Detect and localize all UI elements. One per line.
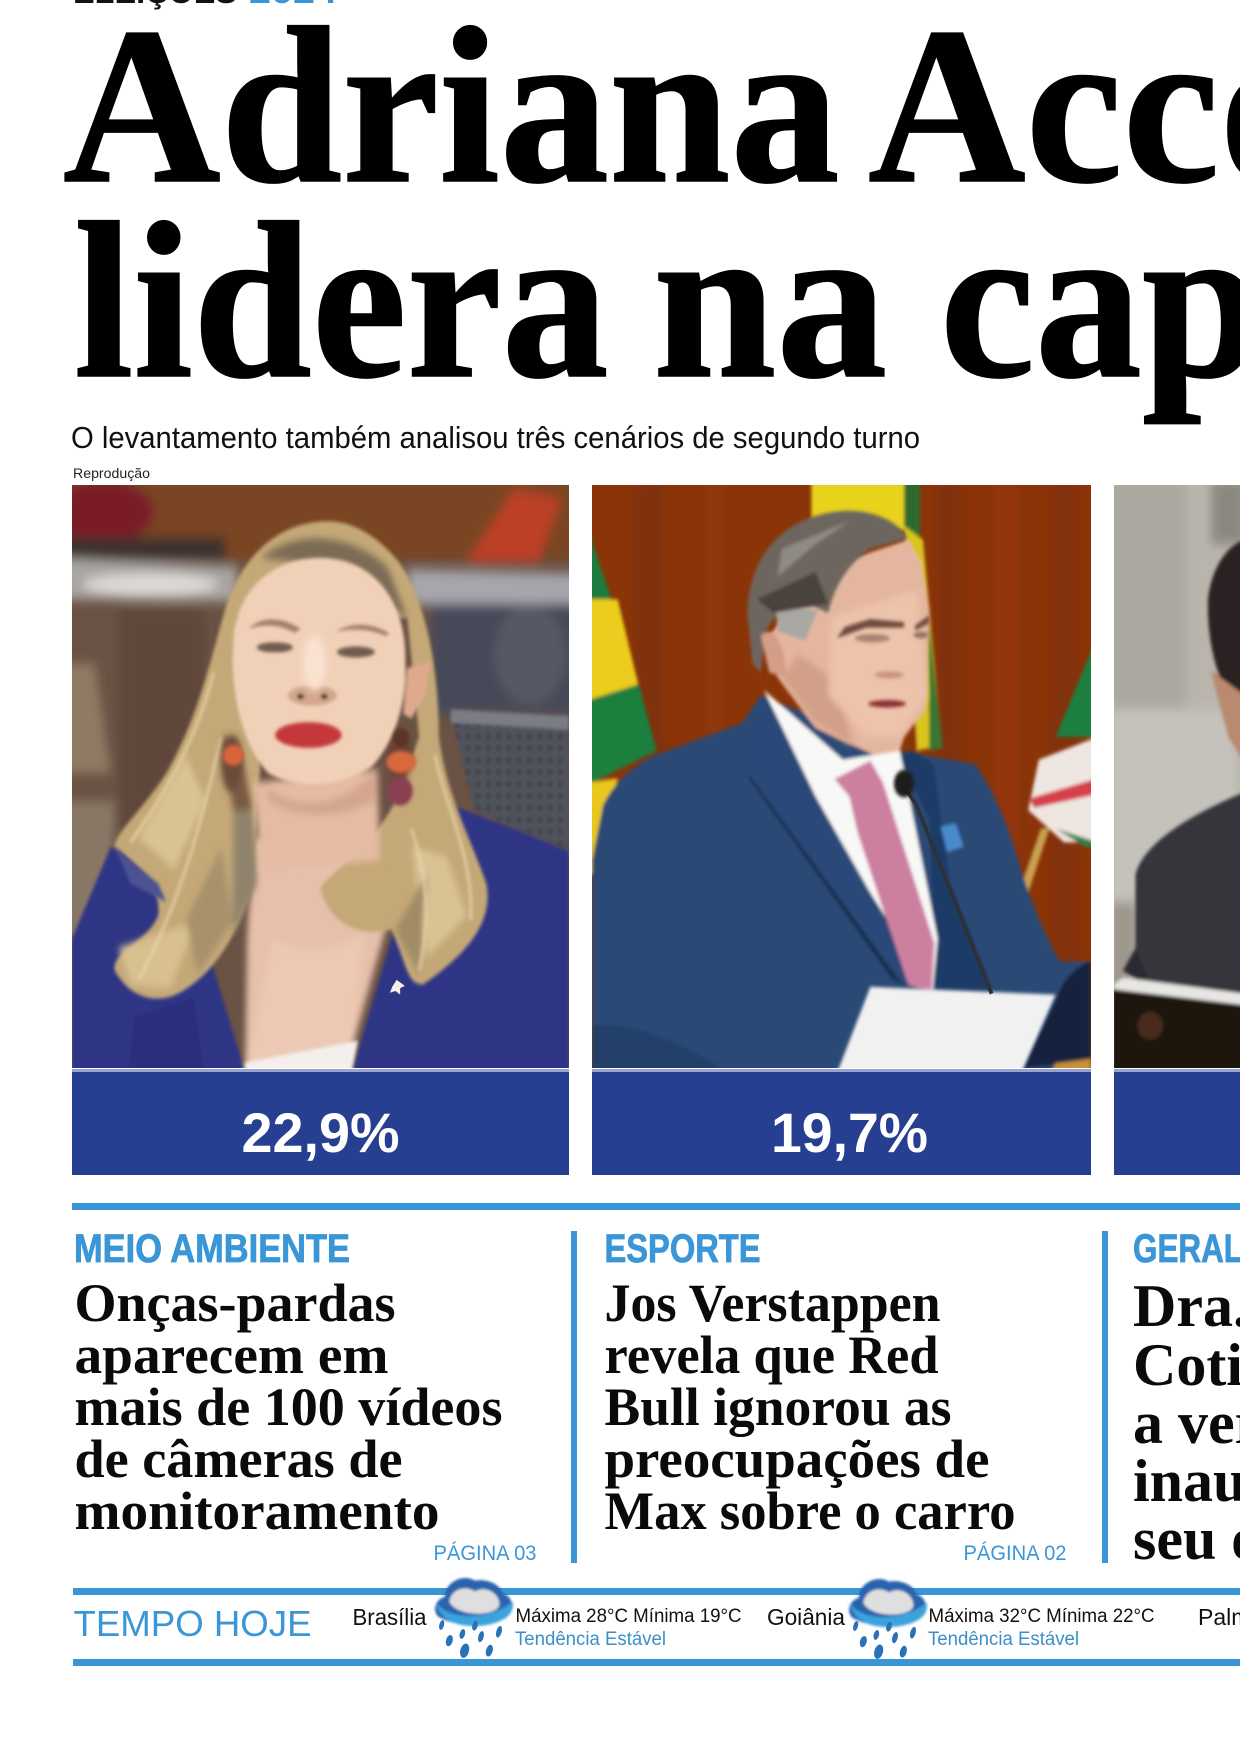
forecast text	[515, 1606, 742, 1650]
news item: geral (cropped)	[1133, 1227, 1240, 1572]
column dividers	[571, 1231, 1108, 1563]
forecast text: Máxima 32°C Mínima 22°C	[928, 1606, 1154, 1627]
forecast text: Tendência Estável	[928, 1629, 1079, 1650]
photo: Adriana Accorsi portrait	[72, 485, 569, 1068]
percent bar (value cropped)	[1114, 1069, 1240, 1175]
section label: MEIO AMBIENTE	[74, 1227, 350, 1271]
news item: meio ambiente	[74, 1227, 536, 1565]
forecast text: Máxima 28°C Mínima 19°C	[516, 1606, 742, 1627]
headline: aparecem em	[74, 1325, 389, 1385]
weather: Goiânia	[767, 1579, 1154, 1660]
headline: preocupações de	[604, 1429, 990, 1489]
headline: mais de 100 vídeos	[74, 1377, 502, 1437]
photo credit: Reprodução	[73, 465, 150, 481]
headline: Onças-pardas	[74, 1273, 396, 1333]
headline: de câmeras de	[74, 1429, 402, 1489]
section rule	[72, 1203, 1240, 1210]
headline	[74, 1273, 502, 1541]
headline: Max sobre o carro	[604, 1481, 1016, 1541]
panel: candidate 3 (cropped)	[1110, 480, 1240, 1175]
headline	[604, 1273, 1016, 1541]
panel: candidate 1 Adriana Accorsi	[51, 480, 589, 1175]
headline	[1133, 1273, 1240, 1572]
headline: Coti	[1133, 1332, 1240, 1398]
title headline	[63, 0, 1240, 425]
weather: Goiânia: Goiânia	[767, 1604, 845, 1630]
percent bar: 22,9%: 22,9%	[242, 1101, 400, 1164]
news item: esporte	[604, 1227, 1066, 1565]
headline: Bull ignorou as	[604, 1377, 952, 1437]
title headline: lidera	[74, 178, 609, 425]
weather: Brasília: Brasília	[352, 1604, 427, 1630]
icon: rain cloud	[435, 1578, 513, 1659]
page reference: PÁGINA 02	[964, 1542, 1066, 1565]
forecast text	[928, 1606, 1154, 1650]
headline: Jos Verstappen	[604, 1273, 940, 1333]
photo: male candidate at lectern	[592, 485, 1091, 1068]
percent bar: 19,7%: 19,7%	[771, 1101, 928, 1164]
headline: monitoramento	[74, 1481, 440, 1541]
kicker: ELEIÇÕES 2024	[73, 0, 337, 10]
weather strip	[73, 1578, 1240, 1666]
percent bar: 22,9%	[72, 1069, 569, 1175]
photo: third candidate cropped	[1114, 485, 1240, 1068]
section label: ESPORTE	[604, 1227, 760, 1271]
icon: rain cloud	[849, 1579, 927, 1660]
headline: revela que Red	[604, 1325, 938, 1385]
weather: Brasília	[352, 1578, 742, 1659]
subtitle: O levantamento também analisou três cenários de segundo turno	[71, 420, 920, 455]
weather label: TEMPO HOJE	[74, 1603, 312, 1644]
forecast text: Tendência Estável	[515, 1629, 666, 1650]
panel: candidate 2	[588, 480, 1098, 1175]
title headline: na	[653, 177, 887, 425]
page reference: PÁGINA 03	[434, 1542, 536, 1565]
percent bar: 19,7%	[592, 1069, 1091, 1175]
